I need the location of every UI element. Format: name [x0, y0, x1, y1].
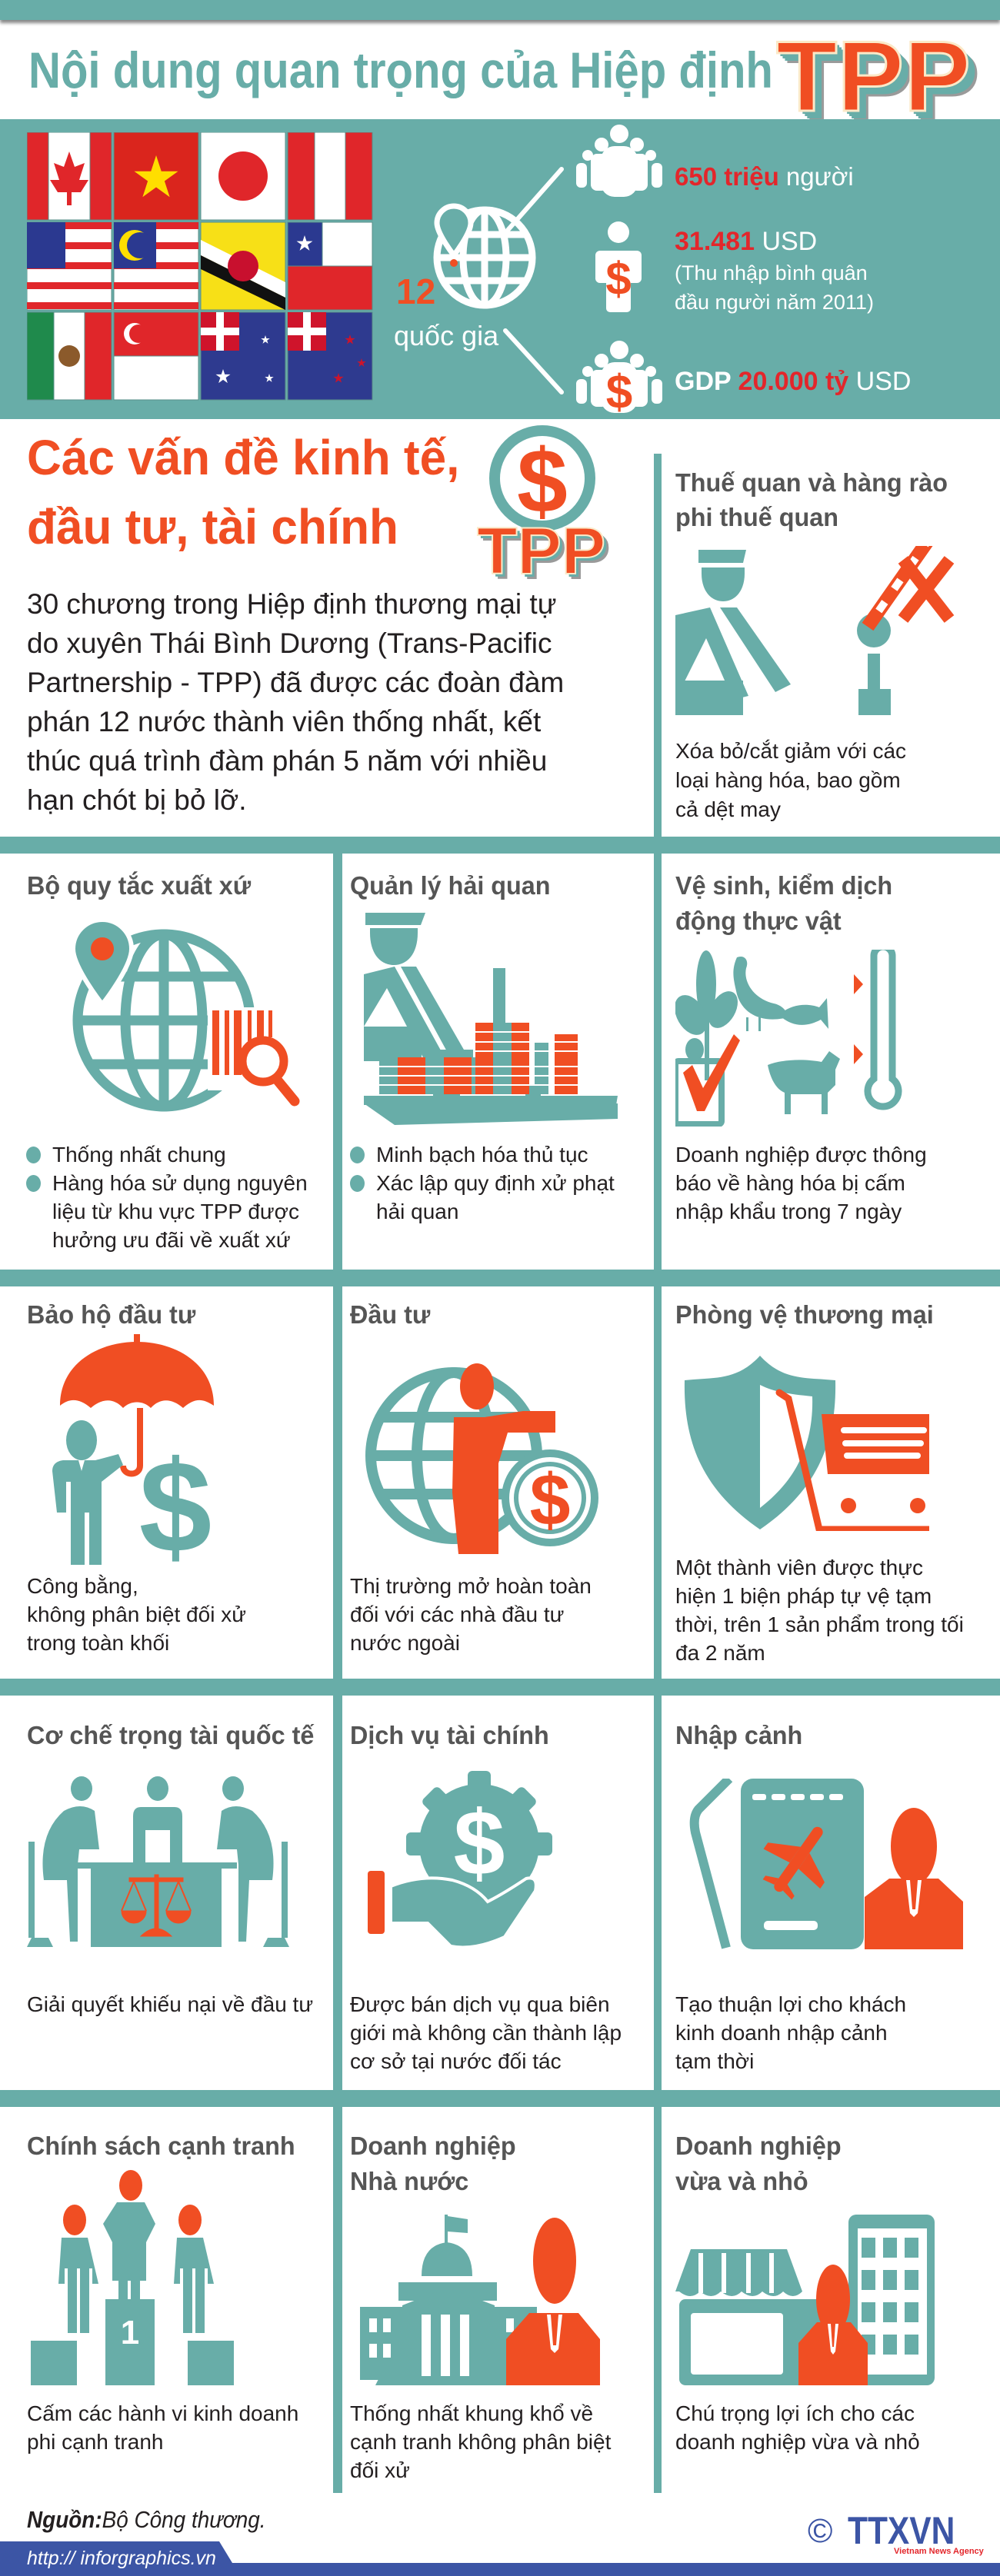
heading: Bộ quy tắc xuất xứ: [27, 871, 251, 900]
tagline: Vietnam News Agency: [894, 2547, 984, 2556]
text: Tạo thuận lợi cho khách: [675, 1992, 906, 2016]
text: Xóa bỏ/cắt giảm với các: [675, 739, 906, 763]
panel: SMEs: [662, 2107, 1000, 2493]
panel: trade remedies: [675, 1300, 964, 1665]
flags puzzle: [27, 132, 372, 400]
text: cả dệt may: [675, 797, 781, 821]
heading: động thực vật: [675, 907, 842, 935]
copyright mark: ©: [808, 2512, 832, 2550]
text: [27, 2399, 298, 2456]
text: kinh doanh nhập cảnh: [675, 2021, 888, 2045]
heading: Bảo hộ đầu tư: [27, 1300, 195, 1329]
note: đầu người năm 2011): [675, 291, 874, 314]
text: tạm thời: [675, 2049, 754, 2073]
heading: Quản lý hải quan: [350, 871, 551, 900]
text: thời, trên 1 sản phẩm trong tối: [675, 1612, 964, 1636]
icon: globe with pin: [434, 203, 535, 309]
text: cơ sở tại nước đối tác: [350, 2049, 562, 2073]
heading: Dịch vụ tài chính: [350, 1721, 549, 1749]
bullet list: liệu từ khu vực TPP được: [52, 1200, 299, 1223]
bullet list: hưởng ưu đãi về xuất xứ: [52, 1228, 291, 1252]
text: intro: [27, 588, 564, 816]
bullet list: [26, 1143, 308, 1252]
heading: Nhà nước: [350, 2167, 468, 2195]
note: [675, 261, 874, 314]
panel: immigration: [662, 1696, 1000, 2090]
icon: people group: [576, 125, 662, 197]
panel: rules of origin: [26, 871, 308, 1252]
title: Nội dung quan trọng của Hiệp định: [28, 42, 773, 98]
text: Được bán dịch vụ qua biên: [350, 1992, 610, 2016]
logo: TTXVN: [808, 2513, 981, 2558]
text: giới mà không cần thành lập: [350, 2021, 622, 2045]
panel: competition policy: [0, 2107, 333, 2493]
heading: Vệ sinh, kiểm dịch: [675, 871, 892, 900]
heading: [350, 2128, 516, 2199]
panel: state enterprises: [342, 2107, 654, 2493]
icon: podium: 1: [121, 2314, 139, 2351]
icon: shop and building with man: [675, 2215, 937, 2385]
text: [27, 1574, 246, 1655]
text: [675, 739, 906, 821]
heading: economic issues: đầu tư, tài chính: [27, 499, 398, 554]
bullet list: Hàng hóa sử dụng nguyên: [52, 1171, 308, 1195]
panel: customs: [350, 871, 618, 1223]
heading: Doanh nghiệp: [350, 2132, 516, 2160]
bullet list: [350, 1143, 615, 1223]
text: Công bằng,: [27, 1574, 138, 1598]
icon: TPP coin: [477, 425, 611, 584]
text: loại hàng hóa, bao gồm: [675, 768, 901, 792]
grid bands: [0, 837, 1000, 854]
panel: tariffs: [675, 468, 954, 821]
stat: population: 650 triệu người: [675, 162, 854, 191]
bullet list: hải quan: [376, 1200, 458, 1223]
text: intro: hạn chót bị bỏ lỡ.: [27, 784, 247, 816]
icon: passport and businessman: [683, 1779, 968, 1949]
footer url: http:// inforgraphics.vn: [27, 2548, 216, 2569]
source: Nguồn:Bộ Công thương.: [27, 2506, 266, 2533]
text: trong toàn khối: [27, 1631, 169, 1655]
heading: economic issues: Các vấn đề kinh tế,: [27, 430, 459, 485]
text: không phân biệt đối xử: [27, 1603, 246, 1626]
text: intro: Partnership - TPP) đã được các đoàn đàm: [27, 667, 564, 698]
heading: economic issues: [27, 430, 459, 554]
icon: people group with dollar: [576, 341, 662, 414]
bullet list: Thống nhất chung: [52, 1143, 226, 1167]
text: Doanh nghiệp được thông: [675, 1143, 927, 1167]
heading: [675, 468, 948, 531]
text: intro: phán 12 nước thành viên thống nhất, kết: [27, 706, 541, 737]
icon: plants animals thermometer: [675, 950, 902, 1127]
heading: Nhập cảnh: [675, 1721, 802, 1749]
heading: Chính sách cạnh tranh: [27, 2132, 295, 2160]
icon: globe man coin: $: [530, 1459, 570, 1541]
icon: capitol with man: [360, 2215, 602, 2385]
text: Giải quyết khiếu nại về đầu tư: [27, 1992, 313, 2016]
bullet list: Xác lập quy định xử phạt: [376, 1171, 615, 1195]
text: doanh nghiệp vừa và nhỏ: [675, 2430, 920, 2454]
text: đối xử: [350, 2458, 410, 2482]
panel: arbitration: [27, 1721, 314, 2016]
icon: person with dollar: $: [605, 253, 632, 305]
icon: shield cart: [685, 1356, 929, 1531]
heading: vừa và nhỏ: [675, 2167, 808, 2195]
icon: TPP coin: $: [517, 431, 568, 532]
connector lines: [503, 167, 564, 394]
text: đa 2 năm: [675, 1641, 765, 1665]
text: cạnh tranh không phân biệt: [350, 2430, 611, 2454]
text: đối với các nhà đầu tư: [350, 1603, 564, 1626]
heading: Doanh nghiệp: [675, 2132, 842, 2160]
icon: person with dollar: [595, 221, 642, 312]
text: intro: do xuyên Thái Bình Dương (Trans-Pacific: [27, 627, 552, 659]
value: 31.481 USD: [675, 227, 817, 256]
panel: overview band: [0, 119, 1000, 419]
text: [350, 1990, 622, 2075]
icon: guard with barrier: [675, 546, 954, 715]
note: (Thu nhập bình quân: [675, 261, 868, 285]
panel: sanitary: [675, 871, 927, 1223]
bullet list: Minh bạch hóa thủ tục: [376, 1143, 588, 1167]
label quốc gia: quốc gia: [394, 320, 498, 351]
heading: phi thuế quan: [675, 503, 838, 531]
text: hiện 1 biện pháp tự vệ tạm: [675, 1584, 932, 1608]
panel: investment: [350, 1300, 598, 1655]
text: [350, 2399, 611, 2484]
icon: podium: [31, 2170, 238, 2387]
stat: GDP: GDP 20.000 tỷ USD: [675, 367, 911, 396]
text: nước ngoài: [350, 1631, 460, 1655]
text: Chú trọng lợi ích cho các: [675, 2401, 915, 2425]
text: [675, 1990, 906, 2075]
text: nhập khẩu trong 7 ngày: [675, 1200, 902, 1223]
icon: globe pin barcode: [72, 922, 300, 1112]
heading: Phòng vệ thương mại: [675, 1300, 934, 1329]
text: [675, 1556, 964, 1665]
wordmark: TTXVN: [848, 2509, 955, 2552]
panel: financial services: [342, 1696, 654, 2090]
heading: Đầu tư: [350, 1300, 430, 1329]
text: [675, 1143, 927, 1223]
icon: gear dollar hand: $: [454, 1792, 505, 1895]
icon: umbrella person dollar: [52, 1334, 214, 1565]
text: phi cạnh tranh: [27, 2430, 163, 2454]
text: [675, 2399, 920, 2456]
text: Một thành viên được thực: [675, 1556, 923, 1579]
top band: [0, 0, 1000, 20]
text: [350, 1574, 592, 1655]
icon: meeting with scales: [25, 1776, 291, 1947]
divider vertical: [654, 454, 662, 838]
heading: Thuế quan và hàng rào: [675, 468, 948, 497]
text: Cấm các hành vi kinh doanh: [27, 2401, 298, 2425]
heading: [675, 2128, 842, 2199]
text: intro: thúc quá trình đàm phán 5 năm với nhiều: [27, 745, 547, 777]
footer band: [0, 2541, 1000, 2576]
text: báo về hàng hóa bị cấm: [675, 1171, 905, 1195]
text: Thị trường mở hoàn toàn: [350, 1574, 592, 1598]
icon: officer and ship: [364, 913, 618, 1125]
heading: [675, 871, 892, 935]
text: intro: 30 chương trong Hiệp định thương mại tự: [27, 588, 556, 620]
stat: 12 countries: [394, 271, 498, 351]
number 12: 12: [396, 271, 435, 311]
panel: investment protection: [27, 1300, 246, 1655]
icon: globe man coin: [365, 1363, 598, 1554]
icon: gear dollar hand: [368, 1771, 556, 1949]
text: Thống nhất khung khổ về: [350, 2401, 593, 2425]
heading: Cơ chế trọng tài quốc tế: [27, 1721, 314, 1749]
stat: income: [675, 227, 874, 314]
